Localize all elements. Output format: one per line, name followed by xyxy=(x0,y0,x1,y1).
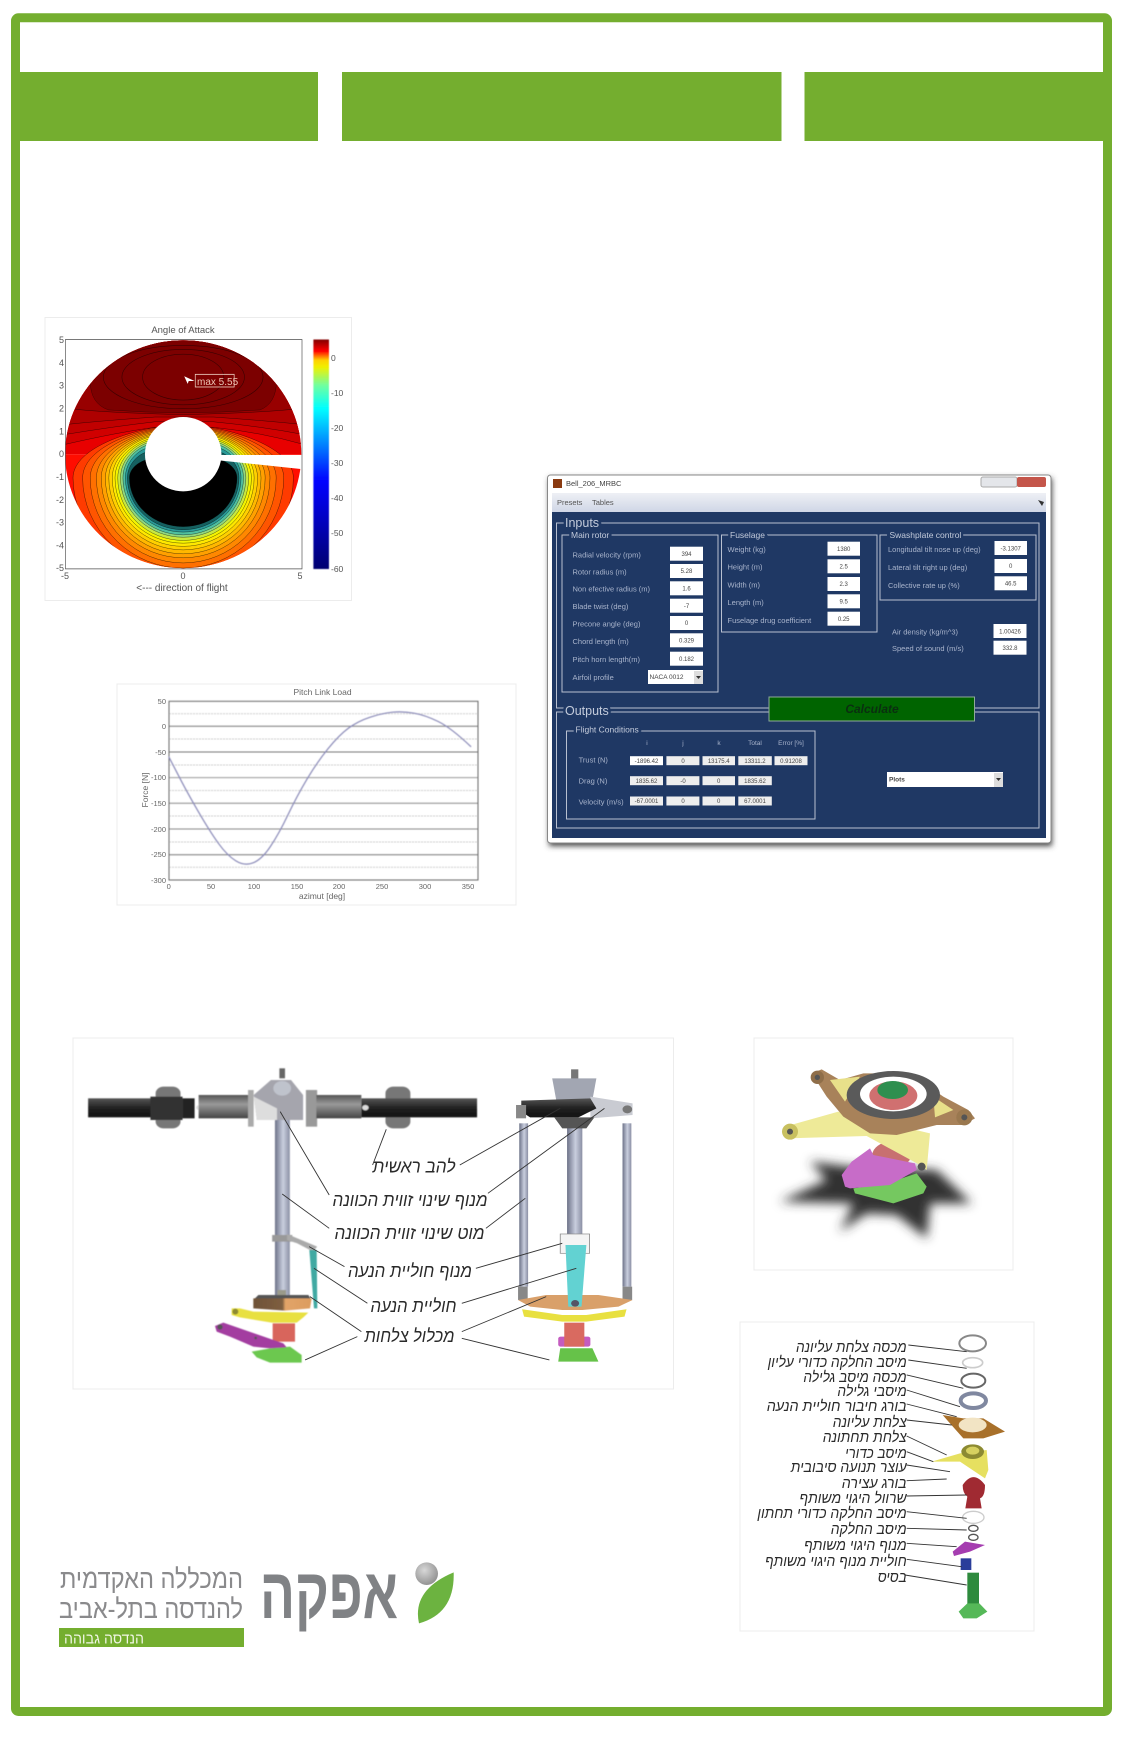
group: outputs xyxy=(556,704,1039,828)
chart: line and grid xyxy=(169,701,478,880)
group: flight conditions: 1835.62 xyxy=(744,779,766,785)
group: flight conditions: Flight Conditions xyxy=(576,724,639,734)
group: main rotor: Airfoil profile xyxy=(572,673,614,682)
x axis ticks: 5 xyxy=(297,571,303,581)
callout labels: מנוף חוליית הנעה xyxy=(348,1261,472,1281)
y axis ticks: -1 xyxy=(56,472,64,482)
y ticks: 0 xyxy=(162,722,166,731)
panel: software window xyxy=(548,475,1052,846)
exploded parts xyxy=(932,1335,1005,1618)
group: fuselage: Length (m) xyxy=(728,598,764,607)
x ticks: 200 xyxy=(333,882,345,891)
colour bar ticks xyxy=(331,353,344,574)
drawing: side view left xyxy=(88,1068,477,1363)
group: main rotor: Rotor radius (m) xyxy=(572,568,627,576)
group: swashplate control: 46.5 xyxy=(1005,582,1017,588)
y axis ticks: 0 xyxy=(59,449,64,459)
logo: Afeka xyxy=(59,1554,454,1648)
calculate button xyxy=(769,697,974,721)
group: main rotor: Non efective radius (m) xyxy=(572,584,651,594)
parts list: צלחת עליונה xyxy=(833,1414,907,1431)
parts list: חוליית מנוף היגוי משותף xyxy=(765,1553,907,1570)
x ticks: 150 xyxy=(291,882,303,891)
college name xyxy=(59,1564,243,1624)
group: main rotor: 0 xyxy=(685,621,689,627)
group: main rotor: Pitch horn length(m) xyxy=(572,655,641,664)
swashplate parts xyxy=(782,1069,975,1203)
callout labels: מוט שינוי זווית הכוונה xyxy=(334,1223,484,1243)
callout labels xyxy=(332,1156,488,1346)
group: flight conditions: 0 xyxy=(717,799,721,805)
parts list: מכסה צלחת עליונה xyxy=(796,1339,907,1356)
parts list: בורג עצירה xyxy=(842,1475,907,1492)
y ticks: -250 xyxy=(151,850,166,859)
menu bar xyxy=(552,493,1046,512)
group: flight conditions: 0 xyxy=(717,779,721,785)
menu bar: Presets xyxy=(557,498,583,507)
x ticks: 50 xyxy=(207,882,215,891)
calculate button: Calculate xyxy=(845,702,899,716)
group: flight conditions: k xyxy=(717,740,721,747)
air properties xyxy=(892,624,1026,655)
group: inputs xyxy=(556,516,1039,708)
group: outputs: Outputs xyxy=(565,704,609,718)
x axis label: <--- direction of flight xyxy=(136,583,228,594)
leader lines xyxy=(280,1108,604,1360)
x ticks: 300 xyxy=(419,882,431,891)
colour bar ticks: -30 xyxy=(331,458,344,468)
window title: Bell_206_MRBC xyxy=(566,479,622,488)
y axis ticks: 2 xyxy=(59,404,64,414)
y axis ticks: 1 xyxy=(59,426,64,436)
y axis ticks: 4 xyxy=(59,358,64,368)
air properties: 1.00426 xyxy=(999,630,1022,636)
group: fuselage: 2.5 xyxy=(840,564,849,570)
group: swashplate control: Swashplate control xyxy=(890,530,961,540)
group: flight conditions: -67.0001 xyxy=(635,799,659,805)
group: flight conditions: Error [%] xyxy=(778,740,804,747)
group: fuselage: 0.25 xyxy=(838,617,850,623)
group: swashplate control xyxy=(880,530,1036,600)
group: fuselage: Fuselage drug coefficient xyxy=(728,616,812,625)
header bar: left xyxy=(20,72,318,141)
x ticks xyxy=(167,882,474,891)
group: flight conditions xyxy=(566,724,815,819)
group: main rotor: Radial velocity (rpm) xyxy=(572,550,641,560)
group: flight conditions: 13311.2 xyxy=(744,759,766,765)
y axis ticks: 3 xyxy=(59,380,64,390)
window title xyxy=(553,477,1046,488)
group: main rotor: 394 xyxy=(681,552,692,558)
group: fuselage: Fuselage xyxy=(730,530,765,540)
y axis ticks: -4 xyxy=(56,540,64,550)
x axis ticks: -5 xyxy=(61,571,69,581)
group: swashplate control: -3.1307 xyxy=(1001,546,1022,552)
parts list: מיסב החלקה xyxy=(831,1521,907,1538)
parts list: בורג חיבור חוליית הנעה xyxy=(767,1398,907,1415)
label: max value: max 5.55 xyxy=(197,377,239,388)
group: fuselage: 2.3 xyxy=(840,582,849,588)
parts list: מיסב כדורי xyxy=(845,1445,907,1462)
callout labels: מכלול צלחות xyxy=(364,1326,454,1346)
group: flight conditions: i xyxy=(646,740,648,747)
group: main rotor: 5.28 xyxy=(681,569,693,575)
plots dropdown: Plots xyxy=(889,776,905,784)
x ticks: 250 xyxy=(376,882,388,891)
group: swashplate control: Longitudal tilt nose up (deg) xyxy=(888,545,981,554)
group: main rotor: Blade twist (deg) xyxy=(572,602,629,611)
header bar: right xyxy=(804,72,1103,141)
group: main rotor: Chord length (m) xyxy=(572,637,629,646)
group: flight conditions: Trust (N) xyxy=(579,756,608,764)
group: flight conditions: 13175.4 xyxy=(708,759,730,765)
parts list: צלחת תחתונה xyxy=(823,1429,907,1446)
y ticks: -150 xyxy=(151,799,166,808)
group: main rotor: -7 xyxy=(684,604,690,610)
menu bar: Tables xyxy=(592,498,614,507)
group: fuselage: 1380 xyxy=(837,547,851,553)
air properties: Air density (kg/m^3) xyxy=(892,628,959,636)
colour bar xyxy=(313,340,329,569)
callout labels: מנוף שינוי זווית הכוונה xyxy=(332,1190,488,1210)
chart title: Pitch Link Load xyxy=(293,687,352,697)
shadow xyxy=(780,1162,972,1238)
college name: להנדסה בתל-אביב xyxy=(59,1594,243,1624)
panel: rotor assembly diagram xyxy=(73,1038,674,1389)
window body xyxy=(552,512,1046,838)
group: fuselage: Height (m) xyxy=(728,562,763,572)
parts list: מיסב החלקה כדורי תחתון xyxy=(756,1505,907,1522)
callout labels: חוליית הנעה xyxy=(370,1296,456,1316)
group: flight conditions: 0 xyxy=(681,799,685,805)
parts list: מיסבי גלילה xyxy=(837,1383,907,1400)
green tag: הנדסה גבוהה xyxy=(64,1630,144,1648)
group: flight conditions: -1896.42 xyxy=(635,759,659,765)
parts list: מכסה מיסב גלילה xyxy=(803,1369,907,1386)
y axis label: Force [N] xyxy=(140,773,150,807)
y axis ticks xyxy=(56,335,64,573)
leader lines xyxy=(905,1345,967,1585)
drawing: front view right xyxy=(516,1069,633,1362)
y ticks: -300 xyxy=(151,876,166,885)
brand name: אפקה xyxy=(260,1554,398,1634)
air properties: Speed of sound (m/s) xyxy=(892,644,964,653)
green tag xyxy=(59,1628,244,1648)
y ticks: -100 xyxy=(151,773,166,782)
y ticks: 50 xyxy=(158,697,166,706)
group: fuselage: 9.5 xyxy=(840,600,849,606)
group: flight conditions: Velocity (m/s) xyxy=(579,798,624,806)
parts list: בסיס xyxy=(878,1569,907,1586)
group: swashplate control: Collective rate up (%) xyxy=(888,581,960,590)
x axis label: azimut [deg] xyxy=(299,891,345,901)
panel: pitch link load chart xyxy=(117,684,516,905)
group: flight conditions: 0.91208 xyxy=(780,759,802,765)
group: swashplate control: 0 xyxy=(1009,564,1013,570)
colour bar ticks: -10 xyxy=(331,388,344,398)
parts list: עוצר תנועה סיבובית xyxy=(790,1459,907,1476)
group: main rotor: NACA 0012 xyxy=(650,674,684,681)
chart: contour disc xyxy=(65,339,302,570)
group: swashplate control: Lateral tilt right up (deg) xyxy=(888,563,968,572)
y axis ticks: -3 xyxy=(56,518,64,528)
x axis ticks xyxy=(61,571,303,581)
group: main rotor: 0.182 xyxy=(679,657,695,663)
panel: swashplate 3D render xyxy=(754,1038,1013,1270)
header bar: centre xyxy=(342,72,782,141)
group: fuselage: Width (m) xyxy=(728,580,760,590)
group: main rotor: Main rotor xyxy=(571,530,609,540)
group: flight conditions: 67.0001 xyxy=(744,799,766,805)
plots dropdown xyxy=(887,772,1003,787)
group: main rotor: 1.6 xyxy=(682,586,691,592)
colour bar ticks: -50 xyxy=(331,528,344,538)
colour bar ticks: -40 xyxy=(331,493,344,503)
x axis ticks: 0 xyxy=(180,571,186,581)
college name: המכללה האקדמית xyxy=(60,1564,243,1594)
parts list xyxy=(756,1339,908,1586)
group: main rotor: Precone angle (deg) xyxy=(572,620,641,628)
y ticks: -50 xyxy=(155,748,166,757)
y axis ticks: -5 xyxy=(56,563,64,573)
group: flight conditions: Total xyxy=(748,740,762,747)
group: inputs: Inputs xyxy=(565,516,599,530)
parts list: מנוף היגוי משותף xyxy=(804,1537,907,1554)
plot title: Angle of Attack xyxy=(151,325,215,336)
parts list: מיסב החלקה כדורי עליון xyxy=(767,1354,907,1371)
y ticks xyxy=(151,697,166,885)
group: fuselage xyxy=(722,530,877,632)
x ticks: 350 xyxy=(462,882,474,891)
colour bar ticks: 0 xyxy=(331,353,336,363)
group: fuselage: Weight (kg) xyxy=(728,545,766,554)
group: flight conditions: j xyxy=(681,740,684,747)
group: flight conditions: 1835.62 xyxy=(636,779,658,785)
air properties: 332.8 xyxy=(1002,646,1018,652)
colour bar ticks: -20 xyxy=(331,423,344,433)
y ticks: -200 xyxy=(151,825,166,834)
panel: angle of attack contour plot xyxy=(45,318,352,600)
group: main rotor xyxy=(562,530,718,692)
parts list: שרוול היגוי משותף xyxy=(799,1490,908,1507)
group: flight conditions: 0 xyxy=(681,759,685,765)
x ticks: 0 xyxy=(167,882,171,891)
y axis ticks: 5 xyxy=(59,335,64,345)
icon: ball and leaf xyxy=(415,1562,454,1623)
callout labels: להב ראשית xyxy=(372,1156,456,1176)
x ticks: 100 xyxy=(248,882,260,891)
y axis ticks: -2 xyxy=(56,495,64,505)
group: flight conditions: -0 xyxy=(680,779,686,785)
group: main rotor: 0.329 xyxy=(679,638,695,644)
group: flight conditions: Drag (N) xyxy=(579,776,608,786)
colour bar ticks: -60 xyxy=(331,564,344,574)
panel: exploded view with parts list xyxy=(740,1322,1034,1631)
